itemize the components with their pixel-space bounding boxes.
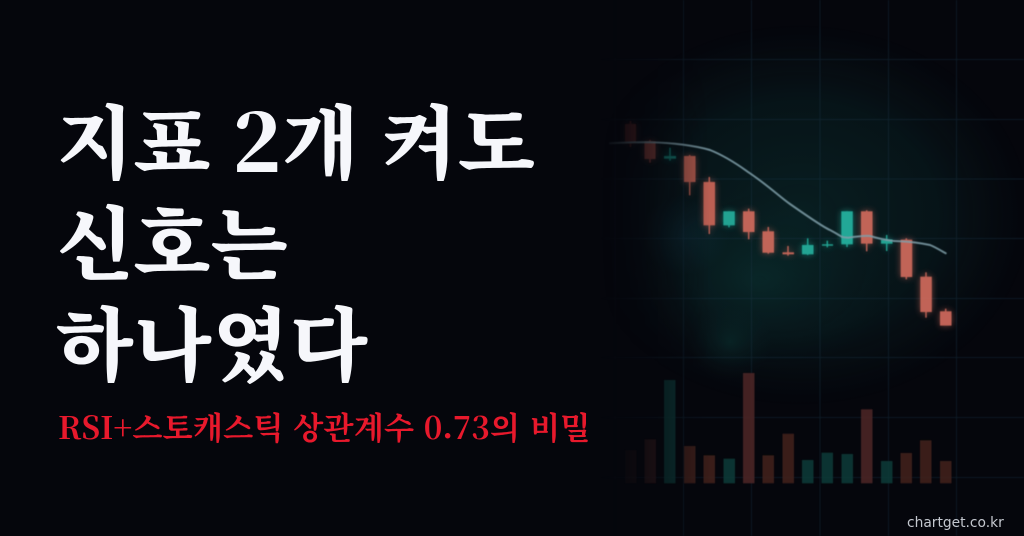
background glow bbox=[652, 75, 969, 368]
subtitle: RSI+스토캐스틱 상관계수 0.73의 비밀 bbox=[58, 402, 590, 448]
moving average line bbox=[610, 142, 946, 253]
watermark: chartget.co.kr bbox=[907, 515, 1004, 531]
volume bars bbox=[625, 373, 952, 483]
title line 2: 신호는 bbox=[56, 180, 288, 296]
title line 1: 지표 2개 켜도 bbox=[56, 80, 535, 194]
candlesticks bbox=[625, 121, 952, 326]
title bbox=[56, 80, 535, 396]
title line 3: 하나였다 bbox=[56, 282, 368, 396]
chart panel bbox=[610, 0, 1024, 536]
